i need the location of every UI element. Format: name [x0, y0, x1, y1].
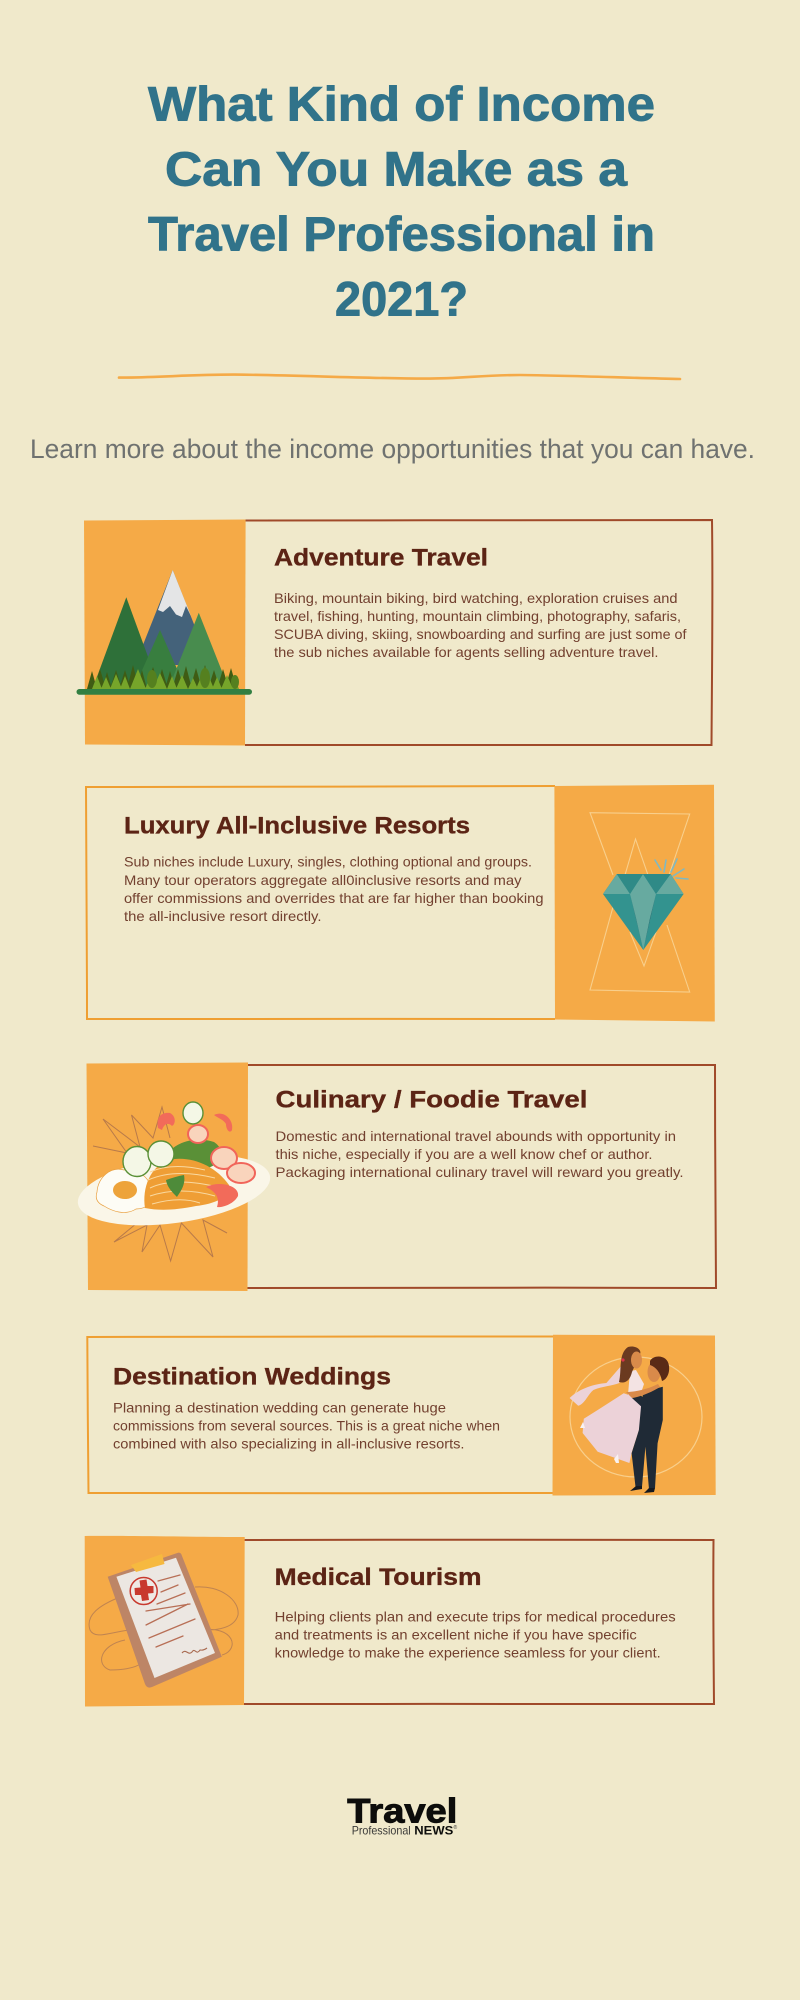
card border — [86, 786, 555, 1019]
body text: combined with also specializing in all-inclusive resorts. — [113, 1436, 464, 1452]
orange block — [86, 1062, 248, 1291]
card border — [247, 1065, 716, 1288]
logo: Travel Professional News: ® — [454, 1824, 458, 1831]
logo: Travel Professional News: NEWS — [414, 1823, 453, 1837]
body text — [113, 1400, 500, 1452]
body text: Domestic and international travel abounds with opportunity in — [276, 1128, 676, 1144]
orange block — [554, 785, 715, 1022]
body text: and treatments is an excellent niche if you have specific — [275, 1627, 637, 1643]
icon: diamond — [590, 813, 690, 992]
subtitle: Learn more about the income opportunities that you can have. — [30, 434, 755, 464]
body text: this niche, especially if you are a well know chef or author. — [276, 1146, 652, 1162]
title — [148, 79, 655, 327]
card border — [244, 1540, 714, 1704]
body text: Packaging international culinary travel will reward you greatly. — [276, 1164, 684, 1180]
title: Travel Professional in — [148, 209, 655, 262]
icon: plate of food — [73, 1102, 275, 1261]
icon: wedding couple — [570, 1347, 702, 1493]
logo: Travel Professional News: Professional — [352, 1823, 411, 1837]
body text: travel, fishing, hunting, mountain climbing, photography, safaris, — [274, 608, 681, 624]
body text — [274, 590, 687, 660]
body text: the all-inclusive resort directly. — [124, 908, 322, 924]
card border — [87, 1336, 553, 1493]
body text: Helping clients plan and execute trips for medical procedures — [275, 1609, 676, 1625]
heading: Culinary / Foodie Travel — [276, 1087, 588, 1114]
card border — [245, 520, 712, 745]
body text: offer commissions and overrides that are far higher than booking — [124, 890, 544, 906]
icon: mountains — [76, 570, 252, 695]
title: Can You Make as a — [165, 144, 627, 197]
body text: knowledge to make the experience seamless for your client. — [275, 1645, 661, 1661]
body text: commissions from several sources. This is a great niche when — [113, 1418, 500, 1434]
orange block — [552, 1335, 716, 1496]
icon: clipboard — [89, 1553, 238, 1688]
title: 2021? — [335, 274, 468, 327]
heading: Destination Weddings — [113, 1363, 391, 1390]
panel: destination weddings — [87, 1335, 716, 1496]
body text — [275, 1609, 676, 1661]
body text: Many tour operators aggregate all0inclusive resorts and may — [124, 872, 522, 888]
body text: Sub niches include Luxury, singles, clothing optional and groups. — [124, 854, 532, 870]
panel: luxury resorts — [86, 785, 715, 1022]
heading: Medical Tourism — [275, 1564, 482, 1591]
heading: Luxury All-Inclusive Resorts — [124, 812, 470, 839]
panel: culinary travel — [73, 1062, 716, 1291]
body text — [276, 1128, 684, 1180]
title: What Kind of Income — [148, 79, 655, 132]
body text: Biking, mountain biking, bird watching, exploration cruises and — [274, 590, 678, 606]
heading: Adventure Travel — [274, 545, 488, 572]
body text: the sub niches available for agents selling adventure travel. — [274, 644, 658, 660]
panel: medical tourism — [85, 1536, 714, 1706]
body text — [124, 854, 544, 924]
body text: SCUBA diving, skiing, snowboarding and surfing are just some of — [274, 626, 687, 642]
orange hand-drawn divider — [119, 375, 680, 379]
orange block — [84, 520, 246, 746]
logo: Travel Professional News: Travel — [347, 1793, 457, 1831]
body text: Planning a destination wedding can generate huge — [113, 1400, 446, 1416]
orange block — [85, 1536, 245, 1706]
panel: adventure travel — [76, 520, 712, 746]
